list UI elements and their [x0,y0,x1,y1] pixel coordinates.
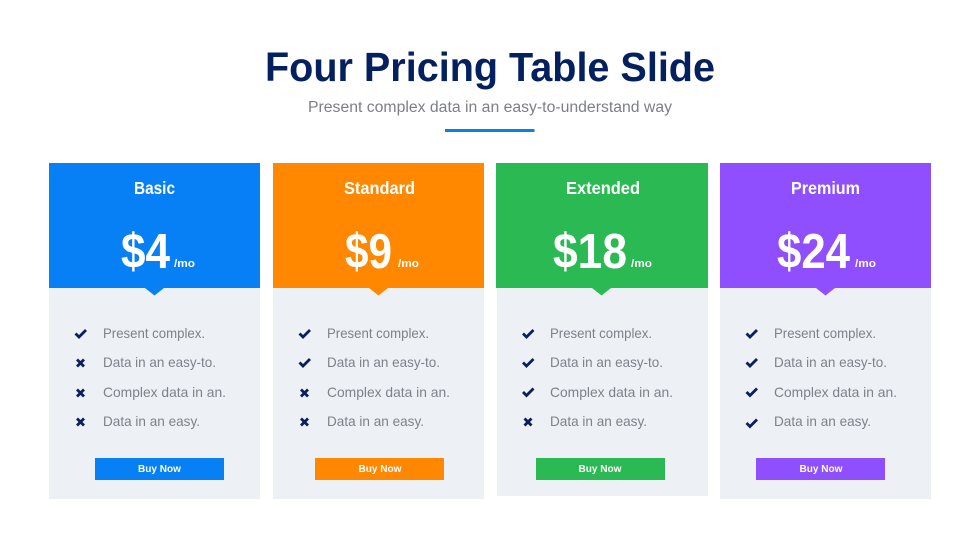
feature row 2: Data in an easy-to. [103,354,216,370]
plan name: Extended: Extended [566,178,640,198]
plan name: Basic: Basic [134,178,175,198]
button: Extended: Buy Now [578,463,622,475]
period: Basic: /mo [174,258,195,270]
feature row 4: Data in an easy. [327,413,424,429]
feature row 3: Complex data in an. [103,384,226,400]
panel: Basic [49,163,260,499]
feature row 2: Data in an easy-to. [327,354,440,370]
plan name: Premium: Premium [791,178,860,198]
button: Standard [315,458,444,480]
price: $24: $24 [777,225,850,279]
pointer: Basic [145,288,164,296]
button: Basic: Buy Now [138,463,182,475]
feature row 3: Complex data in an. [774,384,897,400]
button: Basic [95,458,224,480]
feature row 1: Present complex. [103,325,205,341]
feature row 3: Complex data in an. [550,384,673,400]
panel: Extended [496,163,708,496]
button: Extended [536,458,665,480]
price: $4: $4 [121,225,170,279]
button: Premium: Buy Now [800,463,843,475]
feature row 3: Complex data in an. [327,384,450,400]
panel: Standard [273,163,484,499]
feature row 2: Data in an easy-to. [550,354,663,370]
subtitle: Present complex data in an easy-to-understand way [308,99,672,116]
header: Basic [49,163,260,288]
panel: Premium [720,163,931,499]
period: Premium: /mo [855,258,876,270]
feature row 4: Data in an easy. [103,413,200,429]
feature row 4: Data in an easy. [550,413,647,429]
pointer: Premium [816,288,835,296]
feature row 1: Present complex. [327,325,429,341]
period: Standard: /mo [398,258,419,270]
header: Extended [496,163,708,288]
period: Extended: /mo [631,258,652,270]
pointer: Standard [369,288,388,296]
header: Standard [273,163,484,288]
header: Premium [720,163,931,288]
feature row 1: Present complex. [550,325,652,341]
title: Four Pricing Table Slide [265,44,715,90]
plan name: Standard: Standard [344,178,415,198]
feature row 2: Data in an easy-to. [774,354,887,370]
title underline [445,129,534,132]
price: $9: $9 [345,225,392,279]
feature row 1: Present complex. [774,325,876,341]
feature row 4: Data in an easy. [774,413,871,429]
button: Standard: Buy Now [358,463,402,475]
button: Premium [756,458,885,480]
price: $18: $18 [553,225,627,279]
pointer: Extended [592,288,611,296]
